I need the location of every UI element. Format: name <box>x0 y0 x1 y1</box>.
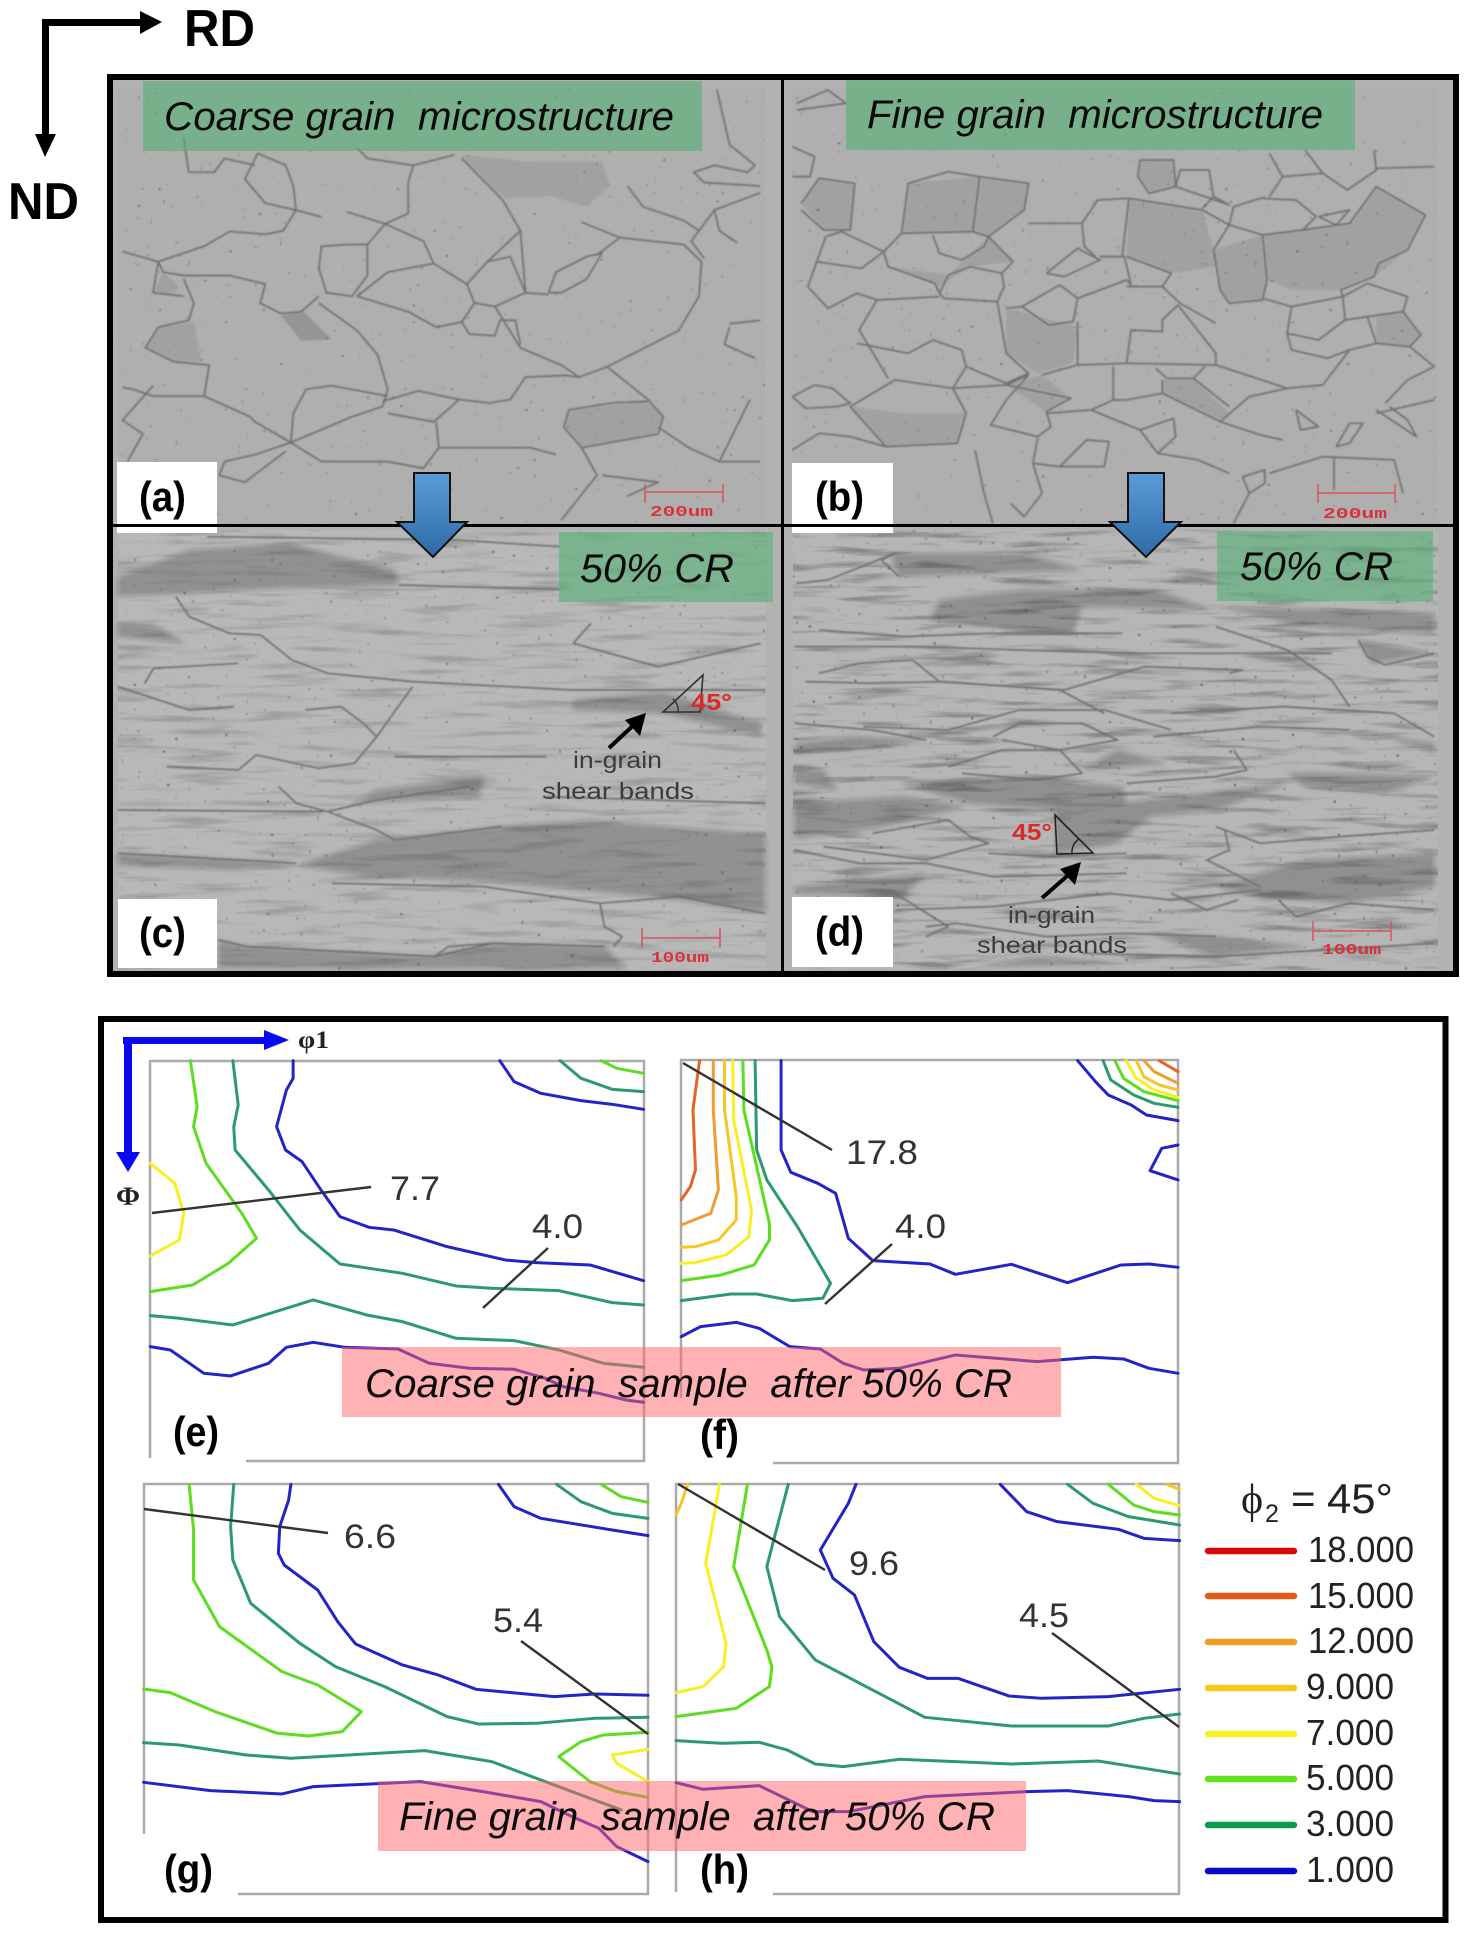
scale bar: 100 um (d): 100um <box>1322 942 1381 959</box>
legend: phi2 contour levels: 5.000 <box>1306 1757 1394 1798</box>
banner: 50% CR (d): 50% CR <box>1240 545 1393 589</box>
annotation: in-grain shear bands (d) <box>977 815 1127 958</box>
banner: coarse grain microstructure <box>143 81 702 151</box>
axis: RD and ND directions: ND <box>8 173 79 231</box>
label (d) <box>792 897 893 967</box>
label (c): (c) <box>139 909 186 956</box>
chart g: fine grain ODF: (g) <box>164 1846 213 1893</box>
panel c: coarse grain after 50% CR <box>118 530 773 970</box>
panel b: fine grain microstructure <box>792 80 1438 533</box>
label (b): (b) <box>815 473 864 520</box>
legend title: 45° <box>1327 1475 1393 1522</box>
chart e: coarse grain ODF: 7.7 <box>390 1170 440 1208</box>
panel: optical micrographs <box>110 77 1456 974</box>
chart e: coarse grain ODF: 4.0 <box>532 1208 583 1246</box>
legend title: = <box>1291 1475 1316 1522</box>
axis: phi1 and Phi: φ1 <box>298 1027 329 1054</box>
legend: phi2 contour levels: 1.000 <box>1306 1849 1394 1890</box>
chart g: fine grain ODF <box>144 1484 648 1894</box>
banner: 50% CR (c): 50% CR <box>580 547 734 591</box>
label (c) <box>118 899 217 968</box>
scale bar: 200 um (a): 200um <box>650 504 713 521</box>
panel d: fine grain after 50% CR <box>792 530 1438 970</box>
legend title: 2 <box>1265 1500 1279 1528</box>
chart h: fine grain ODF: 9.6 <box>849 1545 899 1583</box>
banner: fine grain microstructure: Fine grain microstructure <box>867 93 1323 137</box>
label (d): (d) <box>815 908 864 955</box>
legend: phi2 contour levels <box>1208 1475 1414 1890</box>
legend: phi2 contour levels: 3.000 <box>1306 1803 1394 1844</box>
arrow: coarse grain rolling <box>397 473 467 557</box>
axis: RD and ND directions: RD <box>184 0 255 58</box>
scale bar: 200 um (b): 200um <box>1323 506 1387 523</box>
banner: coarse grain microstructure: Coarse grain microstructure <box>164 95 674 139</box>
scale bar: 200 um (b) <box>1318 484 1395 523</box>
chart f: coarse grain ODF: 17.8 <box>846 1134 918 1172</box>
scale bar: 100 um (c) <box>642 928 720 967</box>
annotation: in-grain shear bands (c): in-grain <box>573 747 662 773</box>
axis: RD and ND directions <box>8 0 255 231</box>
legend: phi2 contour levels: 18.000 <box>1308 1529 1414 1570</box>
arrow: fine grain rolling <box>1110 473 1181 557</box>
banner: 50% CR (d) <box>1217 531 1433 601</box>
banner: fine grain sample after 50% CR: Fine grain sample after 50% CR <box>399 1795 995 1839</box>
label (a): (a) <box>139 473 186 520</box>
scale bar: 200 um (a) <box>645 484 723 521</box>
scale bar: 100 um (c): 100um <box>651 950 709 967</box>
annotation: in-grain shear bands (c): shear bands <box>542 778 694 804</box>
legend: phi2 contour levels: 9.000 <box>1306 1666 1394 1707</box>
chart f: coarse grain ODF: 4.0 <box>895 1208 946 1246</box>
chart e: coarse grain ODF <box>150 1061 644 1461</box>
legend: phi2 contour levels: 7.000 <box>1306 1712 1394 1753</box>
chart h: fine grain ODF: 4.5 <box>1019 1597 1069 1635</box>
chart g: fine grain ODF: 6.6 <box>344 1518 396 1556</box>
banner: fine grain microstructure <box>846 80 1355 150</box>
annotation: in-grain shear bands (d): in-grain <box>1008 902 1095 928</box>
legend title: ϕ <box>1241 1477 1263 1523</box>
banner: coarse grain sample after 50% CR: Coarse grain sample after 50% CR <box>365 1362 1012 1406</box>
scale bar: 100 um (d) <box>1313 921 1391 959</box>
banner: coarse grain sample after 50% CR <box>342 1347 1061 1417</box>
legend: phi2 contour levels: 15.000 <box>1308 1575 1414 1616</box>
chart g: fine grain ODF: 5.4 <box>493 1602 543 1640</box>
axis: phi1 and Phi: Φ <box>116 1182 140 1211</box>
banner: 50% CR (c) <box>559 532 773 602</box>
panel a: coarse grain microstructure <box>117 81 765 533</box>
annotation: in-grain shear bands (c): 45° <box>691 689 732 715</box>
chart f: coarse grain ODF: (f) <box>700 1411 739 1458</box>
chart e: coarse grain ODF: (e) <box>173 1408 219 1455</box>
label (b) <box>792 463 893 533</box>
chart f: coarse grain ODF <box>681 1060 1178 1463</box>
panel: ODF sections <box>101 1019 1446 1920</box>
annotation: in-grain shear bands (d): 45° <box>1012 819 1052 845</box>
chart h: fine grain ODF <box>676 1484 1180 1894</box>
label (a) <box>117 462 217 533</box>
legend: phi2 contour levels: 12.000 <box>1308 1620 1414 1661</box>
annotation: in-grain shear bands (c) <box>542 675 732 804</box>
axis: phi1 and Phi <box>116 1027 329 1211</box>
annotation: in-grain shear bands (d): shear bands <box>977 932 1127 958</box>
chart h: fine grain ODF: (h) <box>700 1846 749 1893</box>
banner: fine grain sample after 50% CR <box>378 1781 1026 1851</box>
